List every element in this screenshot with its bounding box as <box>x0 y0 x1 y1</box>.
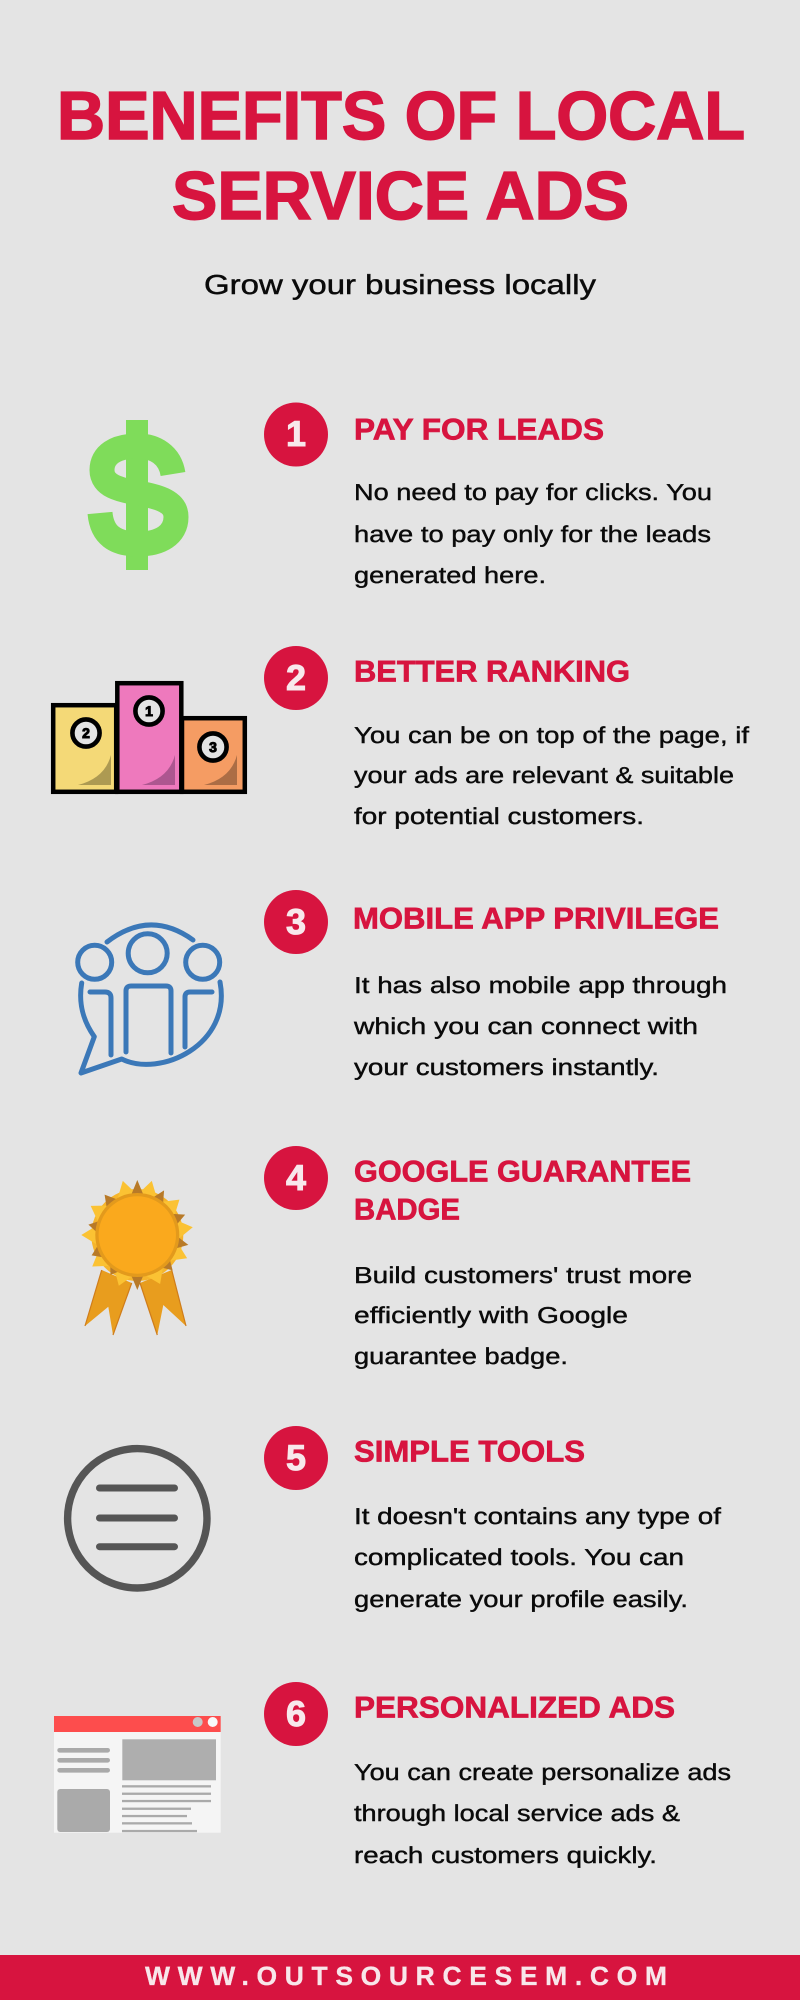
number badge 3 <box>264 890 328 954</box>
body text: complicated tools. You can <box>354 1544 684 1570</box>
number badge 2 <box>264 646 328 710</box>
body text: No need to pay for clicks. You <box>354 479 712 505</box>
footer band with website: WWW.OUTSOURCESEM.COM <box>145 1961 667 1991</box>
heading: simple tools: SIMPLE TOOLS <box>354 1436 585 1468</box>
panel: simple tools <box>68 1426 722 1612</box>
body text: Build customers' trust more <box>354 1262 692 1288</box>
heading: personalized ads: PERSONALIZED ADS <box>354 1692 675 1724</box>
panel: personalized ads <box>54 1682 731 1868</box>
body text <box>354 479 712 588</box>
title: SERVICE ADS <box>172 158 629 234</box>
icon: web page with ads <box>54 1716 221 1833</box>
panel: google guarantee badge <box>81 1146 692 1369</box>
heading: mobile app privilege: MOBILE APP PRIVILEGE <box>353 902 719 936</box>
body text: your customers instantly. <box>354 1054 659 1080</box>
title: BENEFITS OF LOCAL <box>57 78 745 154</box>
body text <box>354 1262 692 1369</box>
number badge 3: 3 <box>286 901 306 942</box>
body text: generated here. <box>354 562 546 588</box>
icon: podium: 3 <box>209 739 217 755</box>
panel: pay for leads <box>100 402 712 588</box>
number badge 1 <box>264 402 328 466</box>
icon: podium <box>53 683 245 792</box>
icon: people in speech bubble <box>78 925 221 1073</box>
body text: reach customers quickly. <box>354 1842 657 1868</box>
number badge 1: 1 <box>286 413 306 454</box>
body text: your ads are relevant & suitable <box>354 762 734 788</box>
number badge 5: 5 <box>286 1437 306 1478</box>
icon: podium: 2 <box>82 725 90 741</box>
body text: You can create personalize ads <box>354 1759 731 1785</box>
body text: have to pay only for the leads <box>354 521 711 547</box>
body text: generate your profile easily. <box>354 1586 688 1612</box>
body text: You can be on top of the page, if <box>354 722 750 748</box>
number badge 4 <box>264 1146 328 1210</box>
body text <box>353 972 727 1080</box>
body text: efficiently with Google <box>354 1302 628 1328</box>
body text: It has also mobile app through <box>354 972 727 998</box>
body text: guarantee badge. <box>354 1343 568 1369</box>
number badge 2: 2 <box>286 657 306 698</box>
subtitle: Grow your business locally <box>204 269 596 300</box>
body text <box>354 1759 731 1868</box>
body text: It doesn't contains any type of <box>354 1503 722 1529</box>
icon: gold medal with ribbons <box>81 1178 194 1335</box>
body text: which you can connect with <box>353 1013 698 1039</box>
icon: circled menu lines <box>68 1449 207 1588</box>
heading: google guarantee badge: GOOGLE GUARANTEE <box>354 1156 691 1188</box>
heading: pay for leads: PAY FOR LEADS <box>354 414 604 446</box>
icon: podium: 1 <box>145 703 153 719</box>
number badge 4: 4 <box>286 1157 306 1198</box>
footer band with website <box>0 1955 800 2000</box>
icon: green dollar sign <box>100 420 176 570</box>
title <box>57 78 745 234</box>
body text <box>354 722 750 829</box>
number badge 5 <box>264 1426 328 1490</box>
heading: google guarantee badge: BADGE <box>354 1194 460 1226</box>
body text: through local service ads & <box>354 1800 680 1826</box>
heading: google guarantee badge <box>354 1156 691 1226</box>
number badge 6 <box>264 1682 328 1746</box>
body text: for potential customers. <box>354 803 644 829</box>
number badge 6: 6 <box>286 1693 306 1734</box>
panel: better ranking <box>53 646 750 829</box>
heading: better ranking: BETTER RANKING <box>354 656 630 688</box>
panel: mobile app privilege <box>78 890 727 1080</box>
body text <box>354 1503 722 1612</box>
